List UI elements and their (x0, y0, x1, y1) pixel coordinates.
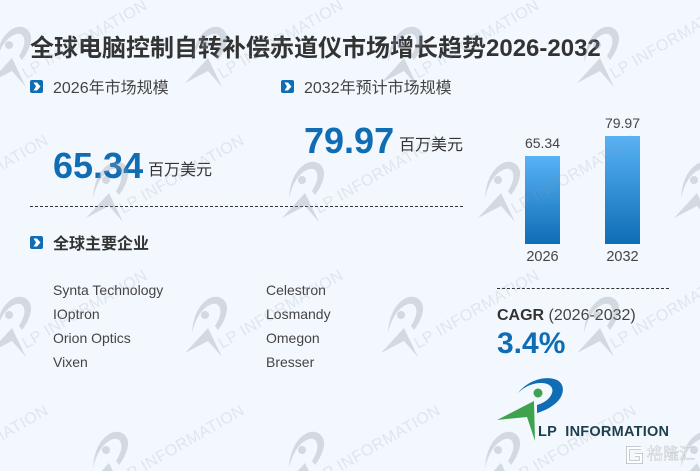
logo: LP Information (497, 378, 669, 441)
watermark pattern: LP INFORMATION (412, 267, 543, 352)
panel: 2026 market size (30, 79, 212, 186)
icon: 2026 bullet (30, 80, 43, 93)
2026 value: 65.34 (53, 145, 143, 186)
CAGR block (497, 307, 636, 360)
bar chart (525, 115, 640, 265)
company: Omegon: Omegon (266, 330, 320, 346)
axis label 2026: 2026 (526, 249, 559, 265)
CAGR value: 3.4% (497, 327, 565, 360)
2032 unit: 百万美元 (399, 137, 463, 154)
company: IOptron: IOptron (53, 306, 100, 322)
logo text: LP INFORMATION (538, 424, 669, 440)
2032 heading: 2032年预计市场规模 (304, 80, 452, 97)
watermark pattern: LP INFORMATION (20, 267, 151, 352)
panel: key companies (30, 235, 331, 370)
company: Synta Technology: Synta Technology (53, 282, 163, 298)
icon: companies bullet (30, 236, 43, 249)
company: Vixen: Vixen (53, 354, 88, 370)
2026 unit: 百万美元 (148, 162, 212, 179)
bar 2032 (605, 136, 640, 244)
bar 2026 (525, 156, 560, 244)
value label 2026: 65.34 (525, 135, 560, 151)
logo dot (534, 388, 542, 398)
watermark pattern: LP INFORMATION (116, 132, 248, 217)
2026 heading: 2026年市场规模 (53, 80, 169, 97)
value label 2032: 79.97 (605, 115, 640, 131)
company: Bresser: Bresser (266, 354, 314, 370)
logo arc (518, 378, 563, 413)
axis label 2032: 2032 (606, 249, 639, 265)
company: Celestron: Celestron (266, 282, 326, 298)
watermark pattern: LP INFORMATION (508, 132, 640, 217)
source badge: Gelonghui (626, 445, 695, 464)
2032 value: 79.97 (304, 120, 394, 161)
badge text: 格隆汇 (647, 446, 695, 463)
watermark pattern: LP INFORMATION (312, 132, 444, 217)
logo arrow (497, 401, 535, 441)
title: 全球电脑控制自转补偿赤道仪市场增长趋势2026-2032 (30, 35, 601, 62)
company: Losmandy: Losmandy (266, 306, 331, 322)
companies heading: 全球主要企业 (53, 236, 149, 253)
icon: G mark (626, 446, 643, 464)
company: Orion Optics: Orion Optics (53, 330, 131, 346)
panel: 2032 market size (281, 79, 463, 161)
watermark pattern: LP INFORMATION (216, 267, 347, 352)
CAGR label: CAGR (2026-2032) (497, 307, 636, 324)
icon: 2032 bullet (281, 80, 294, 93)
